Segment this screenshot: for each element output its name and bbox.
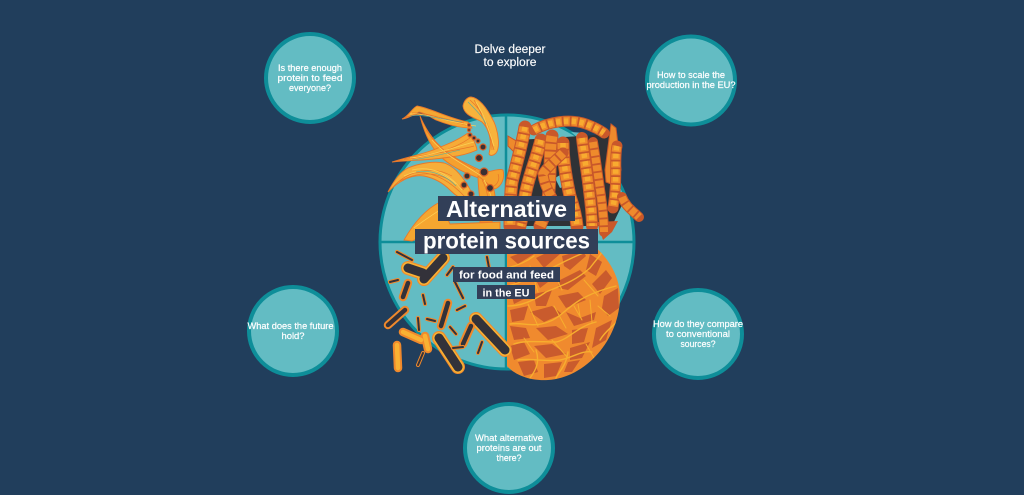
- question bubble: what alternatives: there?: [496, 453, 522, 463]
- heading: delve deeper: to explore: [484, 57, 536, 69]
- question bubble: compare to conventional: sources?: [680, 339, 716, 349]
- question bubble: future: hold?: [282, 331, 304, 341]
- title: alternative: Alternative: [446, 196, 567, 222]
- question bubble: scale production: [646, 36, 736, 124]
- subtitle: in the EU: in the EU: [482, 288, 530, 300]
- question bubble: compare to conventional: How do they compare: [653, 319, 743, 329]
- question bubble: scale production: How to scale the: [657, 70, 725, 80]
- question bubble: enough protein: everyone?: [289, 83, 331, 93]
- question bubble: future: What does the future: [248, 321, 334, 331]
- question bubble: scale production: production in the EU?: [646, 80, 736, 90]
- illustration: mycoprotein meat: [507, 250, 620, 380]
- subtitle: in the EU: [477, 285, 535, 300]
- question bubble: compare to conventional: to conventional: [666, 329, 730, 339]
- subtitle: for food and feed: [453, 267, 560, 282]
- seaweed air bladders: [461, 124, 494, 197]
- question bubble: enough protein: Is there enough: [278, 63, 342, 73]
- illustration: mealworms: [508, 121, 639, 240]
- illustration: bacteria: [388, 252, 505, 368]
- question bubble: compare to conventional: [653, 290, 743, 378]
- question bubble: enough protein: [266, 34, 354, 122]
- question bubble: enough protein: protein to feed: [278, 73, 342, 83]
- question bubble: future: [248, 287, 337, 375]
- heading: delve deeper: [474, 44, 546, 69]
- question bubble: what alternatives: [465, 404, 553, 492]
- illustration: seaweed: [388, 97, 504, 241]
- heading: delve deeper: Delve deeper: [474, 44, 546, 56]
- central quartered disc: [380, 115, 634, 369]
- question bubble: what alternatives: What alternative: [475, 433, 543, 443]
- subtitle: for food and feed: for food and feed: [459, 270, 554, 282]
- question bubble: what alternatives: proteins are out: [476, 443, 542, 453]
- title: protein sources: protein sources: [423, 228, 590, 254]
